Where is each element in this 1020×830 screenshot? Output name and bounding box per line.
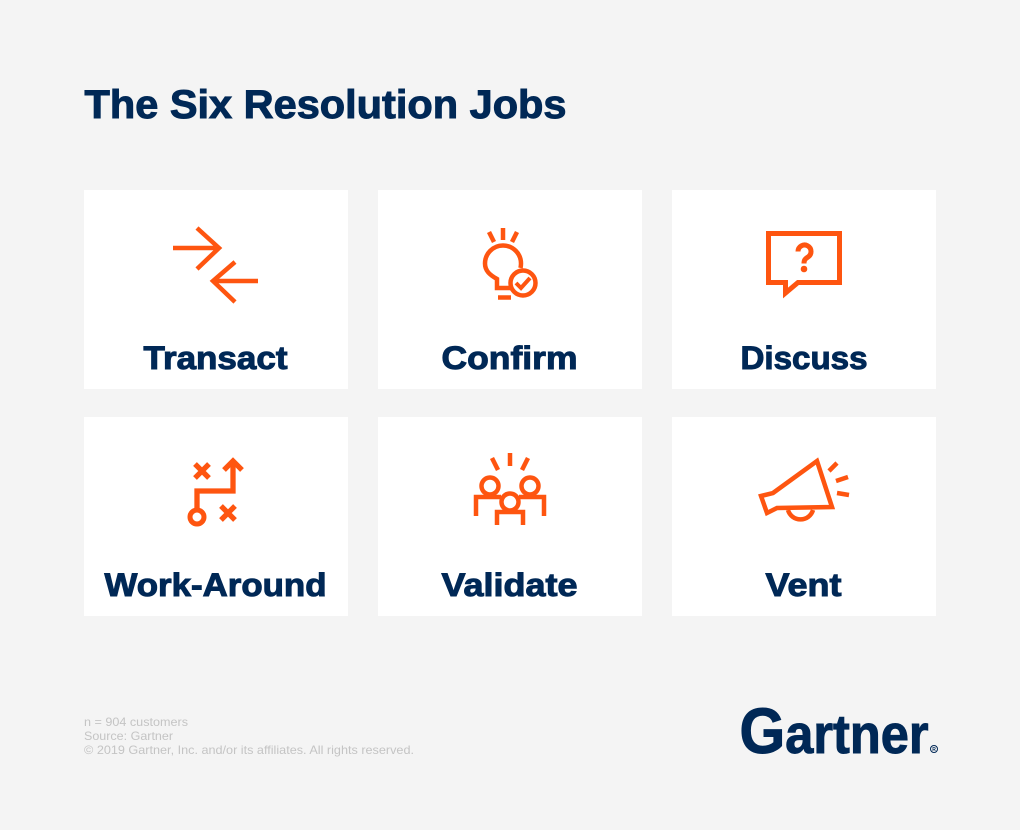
icon: strategy play with arrow (190, 461, 242, 524)
footnote (84, 715, 414, 757)
icon: speech bubble with question mark (768, 234, 840, 293)
footnote: n = 904 customers (84, 715, 188, 729)
icon: opposing arrows (173, 228, 258, 302)
label: Vent: Vent (766, 567, 842, 603)
panel: Vent (672, 417, 936, 616)
logo: Gartner: R (932, 747, 936, 753)
label: Confirm: Confirm (442, 340, 578, 376)
logo: Gartner: Gartner (740, 695, 928, 767)
footnote: Source: Gartner (84, 729, 173, 743)
title: The Six Resolution Jobs (84, 83, 566, 127)
label: Discuss: Discuss (740, 340, 868, 376)
label: Work-Around: Work-Around (104, 567, 326, 603)
icon: light bulb with check (485, 228, 536, 298)
label: Validate: Validate (442, 567, 578, 603)
icon: group of people (476, 453, 544, 525)
icon: megaphone (761, 461, 849, 519)
panel: Work-Around (84, 417, 348, 616)
footnote: © 2019 Gartner, Inc. and/or its affiliates. All rights reserved. (84, 743, 414, 757)
label: Transact: Transact (144, 340, 288, 376)
panel: Transact (84, 190, 348, 389)
panel: Discuss (672, 190, 936, 389)
panel: Confirm (378, 190, 642, 389)
panel: Validate (378, 417, 642, 616)
